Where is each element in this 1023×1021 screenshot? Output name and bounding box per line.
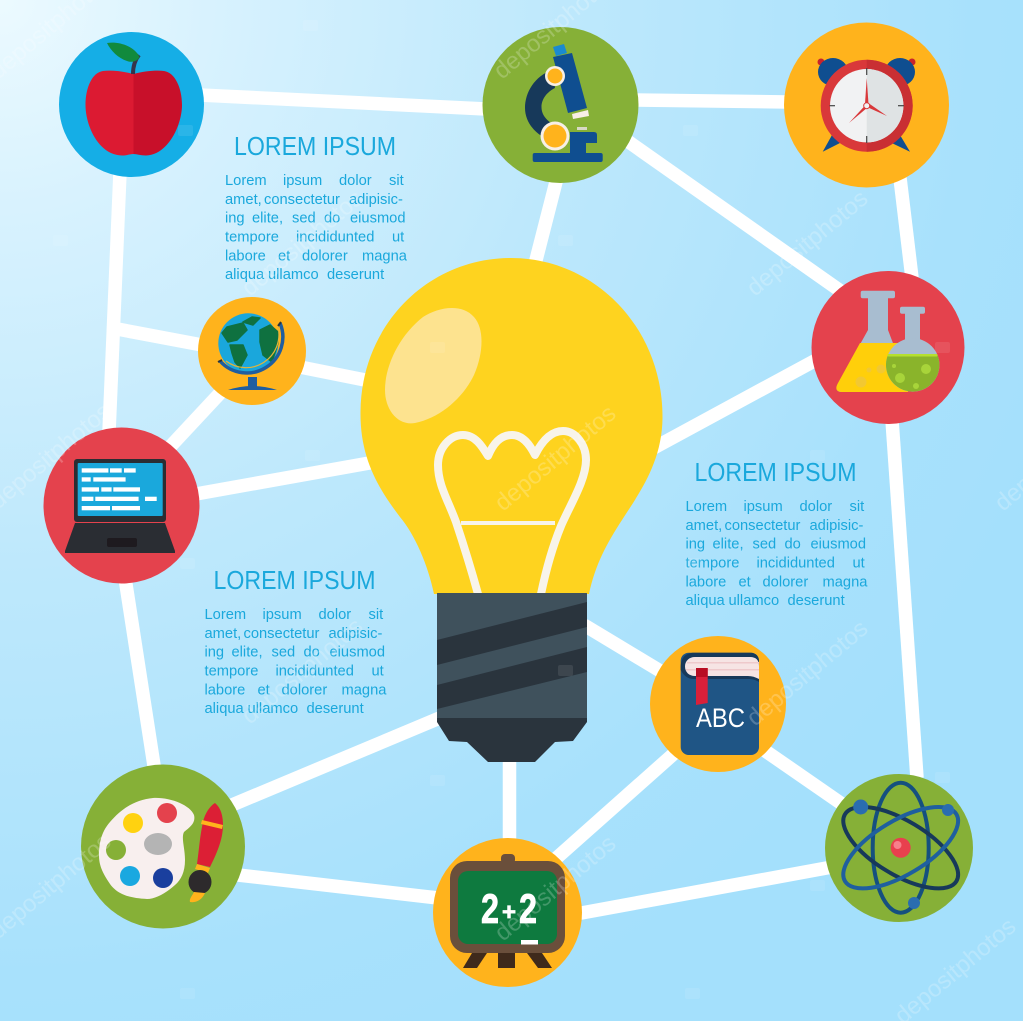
stock photo watermarks: depositphotos [237, 613, 368, 730]
heading: LOREM IPSUM [694, 457, 856, 487]
icon: ABC book [650, 636, 786, 772]
body copy: adipisic- [349, 192, 403, 208]
body copy: dolorer [302, 248, 348, 264]
body copy: Lorem [204, 607, 246, 623]
icon: globe [198, 297, 306, 405]
bulb glass [360, 258, 663, 594]
body copy: do [784, 537, 801, 553]
body copy: dolorer [762, 574, 808, 590]
text block: lower left [204, 565, 391, 717]
board second digit: 2 [519, 885, 537, 932]
icon: alarm clock [784, 22, 949, 188]
body copy: labore [686, 574, 726, 590]
body copy: eiusmod [350, 211, 406, 227]
body copy: dolor [800, 499, 832, 515]
book label: ABC [696, 703, 745, 733]
heading: LOREM IPSUM [234, 131, 396, 161]
text block: top left [225, 131, 411, 283]
body copy: magna [822, 574, 868, 590]
body copy: incididunted [276, 664, 354, 680]
body copy: labore [204, 682, 245, 698]
body copy: ing [686, 537, 705, 553]
board sum text: 2 [481, 885, 499, 932]
body copy: et [738, 574, 751, 590]
icon: microscope [482, 27, 638, 183]
body copy: tempore [204, 664, 258, 680]
bulb highlight [385, 308, 482, 423]
body copy: Lorem [225, 173, 267, 189]
heading: LOREM IPSUM [214, 565, 376, 595]
body copy: ipsum [283, 173, 322, 189]
body copy: consectetur [244, 626, 320, 642]
body copy: ut [392, 230, 404, 246]
icon: apple [59, 32, 204, 177]
body copy: sit [389, 173, 404, 189]
icon: chemistry flasks [812, 271, 964, 424]
body copy: ing [204, 645, 224, 661]
body copy: sed [752, 537, 776, 553]
body copy: do [304, 645, 320, 661]
bulb screw base [437, 593, 587, 762]
filament [438, 431, 586, 594]
body copy: incididunted [756, 556, 835, 572]
body copy: amet, [204, 626, 241, 642]
icon: atom [825, 774, 973, 922]
body copy: sit [368, 607, 383, 623]
body copy: aliqua [225, 267, 265, 283]
body copy: deserunt [306, 701, 364, 717]
body copy: magna [362, 248, 408, 264]
light bulb [360, 258, 663, 762]
body copy: ing [225, 211, 245, 227]
body copy: adipisic- [328, 626, 382, 642]
body copy: dolor [339, 173, 372, 189]
body copy: et [278, 248, 290, 264]
body copy: eiusmod [810, 537, 866, 553]
body copy: ut [372, 664, 384, 680]
body copy: do [324, 211, 340, 227]
board plus sign: + [502, 899, 516, 926]
stock photo watermarks: depositphotos [490, 400, 621, 517]
stock photo watermarks: depositphotos [742, 185, 873, 302]
body copy: elite, [232, 645, 263, 661]
body copy: sed [292, 211, 316, 227]
body copy: et [258, 682, 270, 698]
body copy: Lorem [686, 499, 727, 515]
body copy: deserunt [327, 267, 384, 283]
body copy: aliqua [204, 701, 245, 717]
body copy: dolorer [282, 682, 327, 698]
body copy: tempore [686, 556, 739, 572]
body copy: tempore [225, 230, 279, 246]
body copy: amet, [686, 518, 722, 534]
stock photo watermarks: depositphotos [237, 185, 368, 302]
body copy: elite, [712, 537, 744, 553]
icon: chalkboard 2+2 [433, 838, 582, 987]
network connector lines [109, 95, 917, 914]
body copy: aliqua [686, 593, 726, 609]
body copy: consectetur [264, 192, 340, 208]
body copy: ullamco [268, 267, 319, 283]
body copy: sed [272, 645, 295, 661]
body copy: ipsum [744, 499, 783, 515]
body copy: ut [852, 556, 865, 572]
body copy: adipisic- [810, 518, 863, 534]
body copy: ipsum [262, 607, 302, 623]
icon: paint palette and brush [81, 764, 245, 928]
body copy: magna [342, 682, 387, 698]
stock photo watermarks: depositphotos [742, 615, 873, 732]
body copy: consectetur [724, 518, 801, 534]
body copy: labore [225, 248, 266, 264]
text block: right [686, 457, 872, 609]
stock photo watermarks: depositphotos [490, 830, 621, 947]
body copy: amet, [225, 192, 262, 208]
body copy: ullamco [248, 701, 298, 717]
body copy: deserunt [788, 593, 845, 609]
body copy: eiusmod [330, 645, 385, 661]
body copy: ullamco [728, 593, 779, 609]
body copy: elite, [252, 211, 283, 227]
body copy: dolor [318, 607, 351, 623]
icon: laptop [44, 428, 200, 584]
body copy: sit [850, 499, 864, 515]
body copy: incididunted [296, 230, 374, 246]
